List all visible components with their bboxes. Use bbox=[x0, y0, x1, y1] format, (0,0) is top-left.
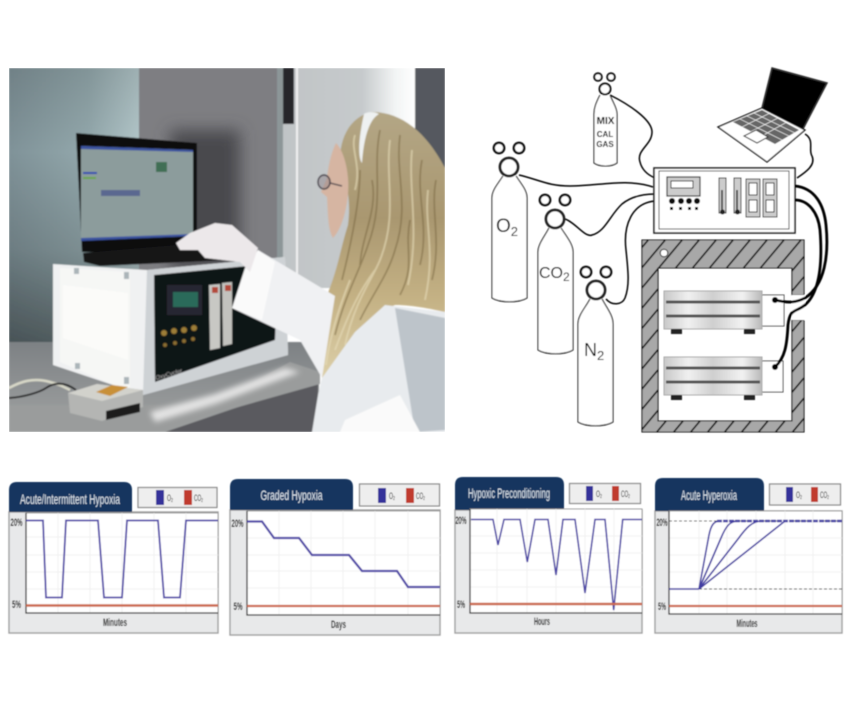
legend: O₂ bbox=[596, 489, 602, 499]
controller unit bbox=[654, 168, 795, 233]
legend: CO₂ bbox=[820, 490, 829, 500]
legend bbox=[570, 484, 640, 504]
tube: controller to lower incubator bbox=[775, 200, 821, 367]
computer monitor bbox=[76, 133, 228, 266]
cylinder: O2: O bbox=[496, 216, 511, 237]
chart panel: Graded Hypoxia bbox=[230, 479, 440, 635]
plot: 5% bbox=[457, 599, 465, 611]
legend bbox=[770, 484, 840, 505]
tube: controller to upper incubator bbox=[775, 186, 827, 302]
chart panel: Hypoxic Preconditioning bbox=[455, 477, 642, 633]
plot: Minutes bbox=[736, 618, 758, 630]
photo: researcher at the ProOx control unit bbox=[9, 68, 445, 432]
researcher face and glasses bbox=[318, 112, 379, 238]
legend bbox=[360, 484, 440, 506]
plot: Days bbox=[331, 619, 346, 631]
cylinder: CO2: CO bbox=[539, 265, 563, 282]
lower animal cage shelf bbox=[664, 357, 783, 400]
gas sensor module bbox=[9, 380, 143, 421]
hatched incubator enclosure bbox=[642, 240, 805, 432]
heading tab bbox=[455, 477, 564, 510]
steel table bbox=[9, 342, 320, 432]
tube end: upper bbox=[772, 297, 778, 303]
plot: 5% bbox=[234, 601, 243, 613]
cylinder: N2: 2 bbox=[597, 348, 604, 363]
legend: CO₂ bbox=[416, 491, 425, 501]
heading tab bbox=[655, 478, 764, 511]
plot: 20% bbox=[10, 517, 23, 529]
plot bbox=[10, 513, 218, 629]
heading tab: Hypoxic Preconditioning bbox=[468, 485, 550, 501]
cylinder: CO2: 2 bbox=[563, 270, 570, 284]
cylinder: mix cal gas: GAS bbox=[596, 140, 614, 149]
gas lines bbox=[519, 95, 813, 304]
legend: O₂ bbox=[796, 490, 802, 500]
cylinder: N2 bbox=[578, 267, 613, 426]
legend: CO₂ bbox=[621, 489, 630, 499]
plot bbox=[456, 509, 642, 628]
plot: 20% bbox=[456, 515, 467, 527]
heading tab bbox=[230, 479, 353, 510]
plot: 5% bbox=[12, 599, 21, 611]
lab coat bbox=[232, 250, 445, 432]
cylinder: N2: N bbox=[584, 340, 597, 360]
legend: CO₂ bbox=[194, 493, 203, 503]
plot bbox=[656, 511, 842, 630]
plot: 5% bbox=[658, 601, 666, 613]
background walls bbox=[9, 68, 445, 348]
control unit chamber bbox=[53, 257, 288, 395]
plot: Minutes bbox=[103, 617, 127, 629]
plot: 20% bbox=[656, 517, 668, 529]
researcher hair bbox=[317, 112, 445, 378]
upper animal cage shelf bbox=[664, 291, 784, 334]
cylinder: mix cal gas bbox=[594, 73, 617, 166]
laptop bbox=[718, 68, 827, 162]
plot: Hours bbox=[534, 616, 550, 628]
legend bbox=[138, 488, 217, 508]
cylinder: O2 bbox=[492, 143, 527, 302]
legend: O₂ bbox=[389, 491, 395, 501]
chart panel: Acute/Intermittent Hypoxia bbox=[9, 482, 218, 633]
gloved hand bbox=[176, 223, 258, 272]
cylinder: O2: 2 bbox=[511, 224, 518, 239]
tube end: lower bbox=[772, 364, 778, 370]
heading tab bbox=[9, 482, 132, 512]
legend: O₂ bbox=[167, 493, 173, 503]
cylinder: mix cal gas: MIX bbox=[597, 116, 615, 127]
cylinder: CO2 bbox=[538, 195, 573, 354]
plot: 20% bbox=[232, 518, 244, 530]
cylinder: mix cal gas: CAL bbox=[597, 130, 613, 139]
plot bbox=[232, 511, 440, 631]
control unit chamber: OxyCycler bbox=[155, 368, 184, 382]
chart panel: Acute Hyperoxia bbox=[655, 478, 842, 633]
heading tab: Acute Hyperoxia bbox=[681, 487, 737, 503]
system schematic bbox=[492, 68, 827, 432]
heading tab: Graded Hypoxia bbox=[260, 487, 323, 503]
heading tab: Acute/Intermittent Hypoxia bbox=[20, 491, 120, 507]
